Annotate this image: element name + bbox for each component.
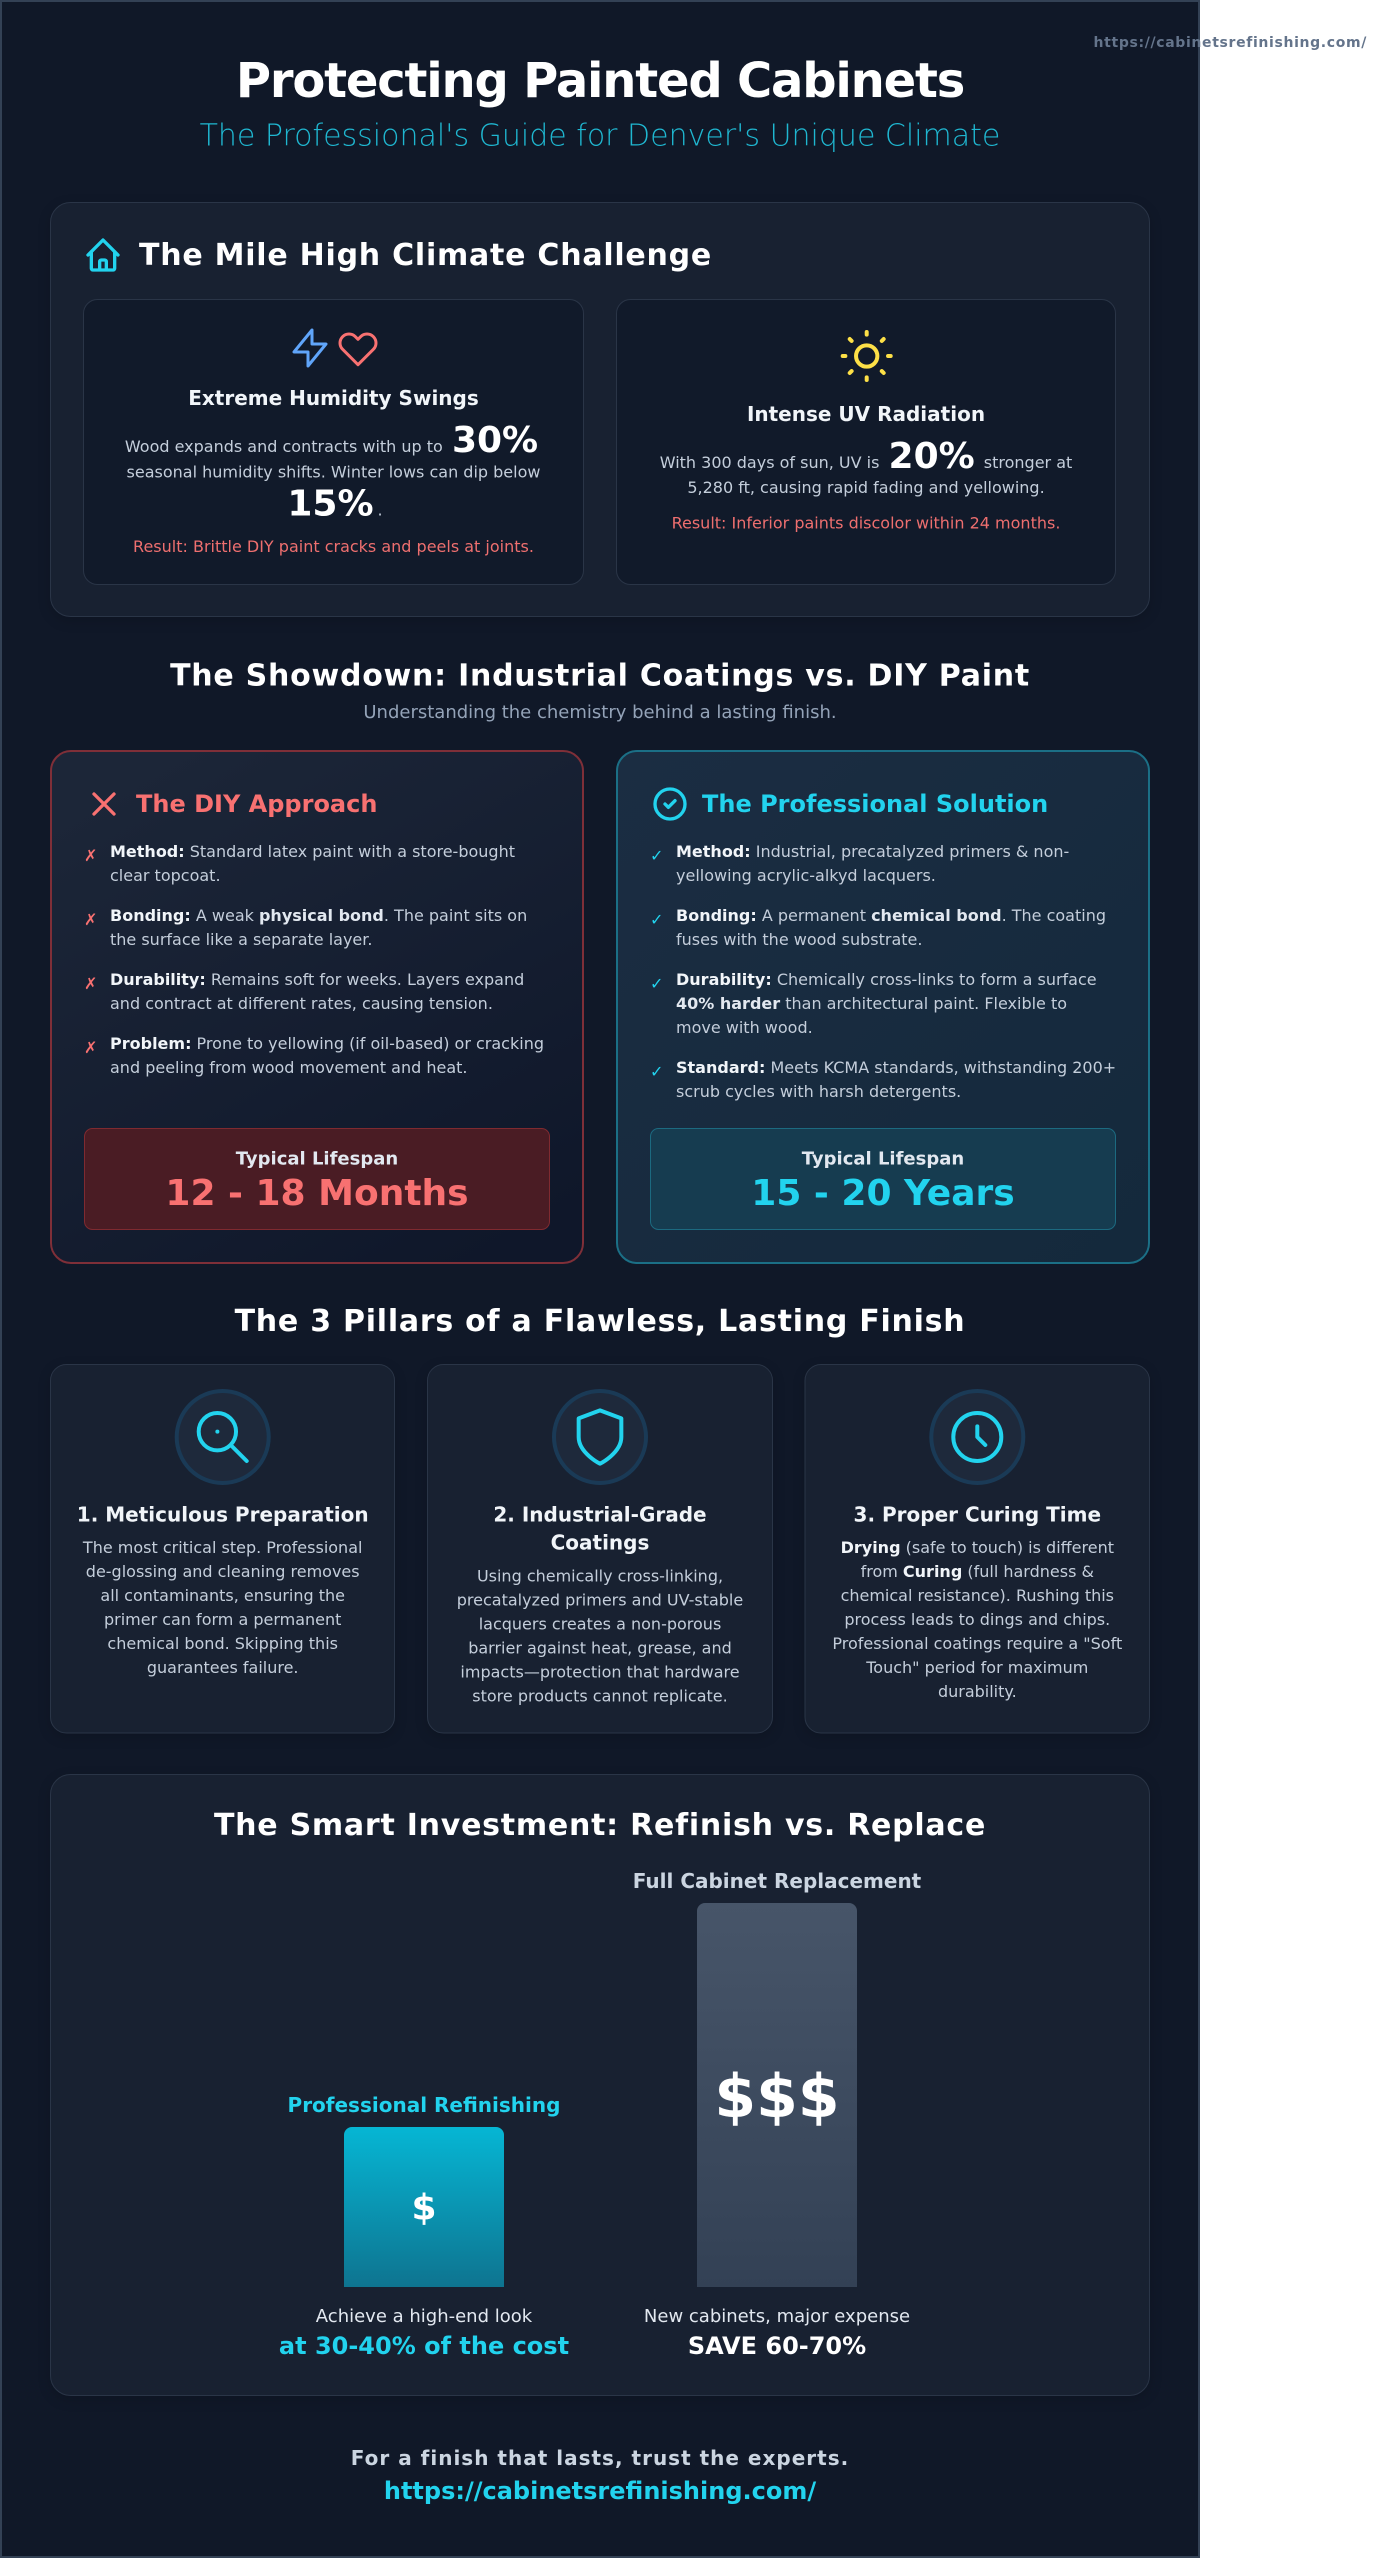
pillar card: coatings [428,1364,772,1733]
result text: Result: Brittle DIY paint cracks and peels at joints. [133,537,534,556]
bar: professional refinishing: $ [411,2188,437,2228]
list: DIY points [84,842,544,1077]
panel: climate challenge [50,202,1150,616]
icon: heart [340,334,376,365]
bar chart: refinish vs replace [279,1869,922,2360]
lifespan label: Typical Lifespan [236,1148,398,1170]
icon: bolt [294,330,326,366]
bar: professional refinishing [288,2093,560,2287]
pillar text: The most critical step. Professional [82,1538,362,1557]
icon: x mark [94,794,114,814]
list: DIY points: ✗ [84,1038,97,1057]
pillar text [457,1566,743,1706]
card body text [125,420,540,524]
pillar text: Drying (safe to touch) is different [841,1538,1114,1557]
showdown subheading: Understanding the chemistry behind a lasting finish. [363,702,837,723]
pillar text: process leads to dings and chips. [844,1610,1110,1629]
pillar text: all contaminants, ensuring the [100,1586,345,1605]
icon: clock [931,1391,1023,1483]
footer tagline: For a finish that lasts, trust the experts. [351,2446,849,2470]
card body text: Wood expands and contracts with up to 30% [125,420,538,461]
pillar text: precatalyzed primers and UV-stable [457,1590,743,1610]
list: professional points: Standard: Meets KCMA standards, withstanding 200+ [676,1058,1116,1077]
card body text: 5,280 ft, causing rapid fading and yellowing. [687,478,1045,497]
bar: full cabinet replacement [633,1869,922,2287]
pillar text: barrier against heat, grease, and [468,1638,732,1658]
list: DIY points: ✗ [84,910,97,929]
list: professional points: move with wood. [676,1018,813,1037]
list: DIY points: Method: Standard latex paint with a store-bought [110,842,515,861]
result text: Result: Inferior paints discolor within 24 months. [672,514,1060,532]
list: DIY points: Problem: Prone to yellowing (if oil-based) or cracking [110,1034,544,1053]
caption: replacement cost: New cabinets, major expense [644,2306,910,2327]
pillar text: store products cannot replicate. [472,1686,728,1706]
card body text: 15%. [287,484,383,524]
pillar text: de-glossing and cleaning removes [86,1562,360,1581]
list: professional points: fuses with the wood substrate. [676,930,922,949]
icon: check circle [655,789,685,819]
subtitle: The Professional's Guide for Denver's Unique Climate [200,118,1000,154]
list: DIY points: Durability: Remains soft for weeks. Layers expand [110,970,524,989]
card heading: Intense UV Radiation [747,402,985,426]
list: DIY points: clear topcoat. [110,866,221,885]
source url: https://cabinetsrefinishing.com/ [1094,35,1367,51]
bar: full cabinet replacement: Full Cabinet Replacement [633,1869,922,1893]
list: DIY points: ✗ [84,974,97,993]
pillar heading: 3. Proper Curing Time [854,1502,1101,1526]
list: professional points: yellowing acrylic-alkyd lacquers. [676,866,936,885]
card: UV [616,300,1116,584]
pillars heading: The 3 Pillars of a Flawless, Lasting Finish [235,1304,965,1339]
pillar text [832,1538,1122,1701]
caption: replacement cost [644,2306,910,2360]
pillar card: curing [805,1364,1150,1733]
list: professional points: Method: Industrial, precatalyzed primers & non- [676,842,1069,861]
panel heading: The Mile High Climate Challenge [139,238,712,273]
list: professional points: 40% harder than architectural paint. Flexible to [676,994,1067,1013]
lifespan value: 12 - 18 Months [165,1173,469,1214]
title: Protecting Painted Cabinets [236,53,964,109]
lifespan box [84,1128,550,1230]
list: professional points: ✓ [650,1062,663,1081]
showdown heading: The Showdown: Industrial Coatings vs. DIY Paint [170,658,1030,694]
panel: DIY approach [51,751,583,1263]
pillar card: preparation [50,1364,394,1733]
list: professional points: ✓ [650,846,663,865]
lifespan box [650,1128,1116,1230]
list: DIY points: the surface like a separate layer. [110,930,372,949]
list: DIY points: and contract at different rates, causing tension. [110,994,493,1013]
panel heading: The DIY Approach [136,790,377,818]
list: DIY points: ✗ [84,846,97,865]
list: DIY points: Bonding: A weak physical bond. The paint sits on [110,906,527,925]
pillar text: guarantees failure. [147,1658,299,1677]
pillar text: chemical resistance). Rushing this [841,1586,1114,1605]
list: professional points [650,842,1116,1101]
pillar text: durability. [938,1682,1017,1701]
list: professional points: scrub cycles with harsh detergents. [676,1082,961,1101]
pillar text: chemical bond. Skipping this [107,1634,338,1653]
pillar text: Professional coatings require a "Soft [832,1634,1122,1653]
pillar card: coatings: Coatings [551,1530,649,1554]
panel heading: The Smart Investment: Refinish vs. Replace [214,1808,986,1843]
icon: sun [843,332,891,380]
card heading: Extreme Humidity Swings [188,386,479,410]
pillar text: lacquers creates a non-porous [479,1614,721,1634]
footer [351,2446,849,2505]
list: professional points: Durability: Chemically cross-links to form a surface [676,970,1097,989]
pillar heading: 2. Industrial-Grade [493,1502,707,1526]
card body text: With 300 days of sun, UV is 20% stronger at [660,436,1072,477]
panel: professional solution [617,751,1149,1263]
list: professional points: ✓ [650,910,663,929]
caption: refinishing cost: at 30-40% of the cost [279,2332,569,2360]
showdown heading [170,658,1030,723]
pillar heading: 1. Meticulous Preparation [77,1502,369,1526]
footer link: https://cabinetsrefinishing.com/ [384,2477,816,2505]
list: professional points: Bonding: A permanent chemical bond. The coating [676,906,1106,925]
caption: refinishing cost: Achieve a high-end look [316,2306,533,2327]
bar: full cabinet replacement: $$$ [714,2062,840,2132]
card body text [660,436,1072,497]
card body text: seasonal humidity shifts. Winter lows can dip below [127,462,540,482]
card: humidity [84,300,584,584]
pillar text: Touch" period for maximum [865,1658,1088,1677]
caption: replacement cost: SAVE 60-70% [688,2332,866,2360]
panel: smart investment [50,1774,1150,2396]
icon: shield [554,1391,646,1483]
caption: refinishing cost [279,2306,569,2360]
icon: house [88,240,118,270]
pillar text: from Curing (full hardness & [861,1562,1094,1581]
pillar text: Using chemically cross-linking, [477,1566,723,1586]
list: DIY points: and peeling from wood movement and heat. [110,1058,467,1077]
list: professional points: ✓ [650,974,663,993]
pillar text [82,1538,362,1677]
lifespan value: 15 - 20 Years [751,1173,1015,1214]
bar: professional refinishing: Professional Refinishing [288,2093,560,2117]
header [200,53,1000,154]
panel heading: The Professional Solution [702,790,1048,818]
icon: magnifier [177,1391,269,1483]
lifespan label: Typical Lifespan [802,1148,964,1170]
pillar text: impacts—protection that hardware [460,1662,740,1682]
pillar text: primer can form a permanent [104,1610,341,1629]
